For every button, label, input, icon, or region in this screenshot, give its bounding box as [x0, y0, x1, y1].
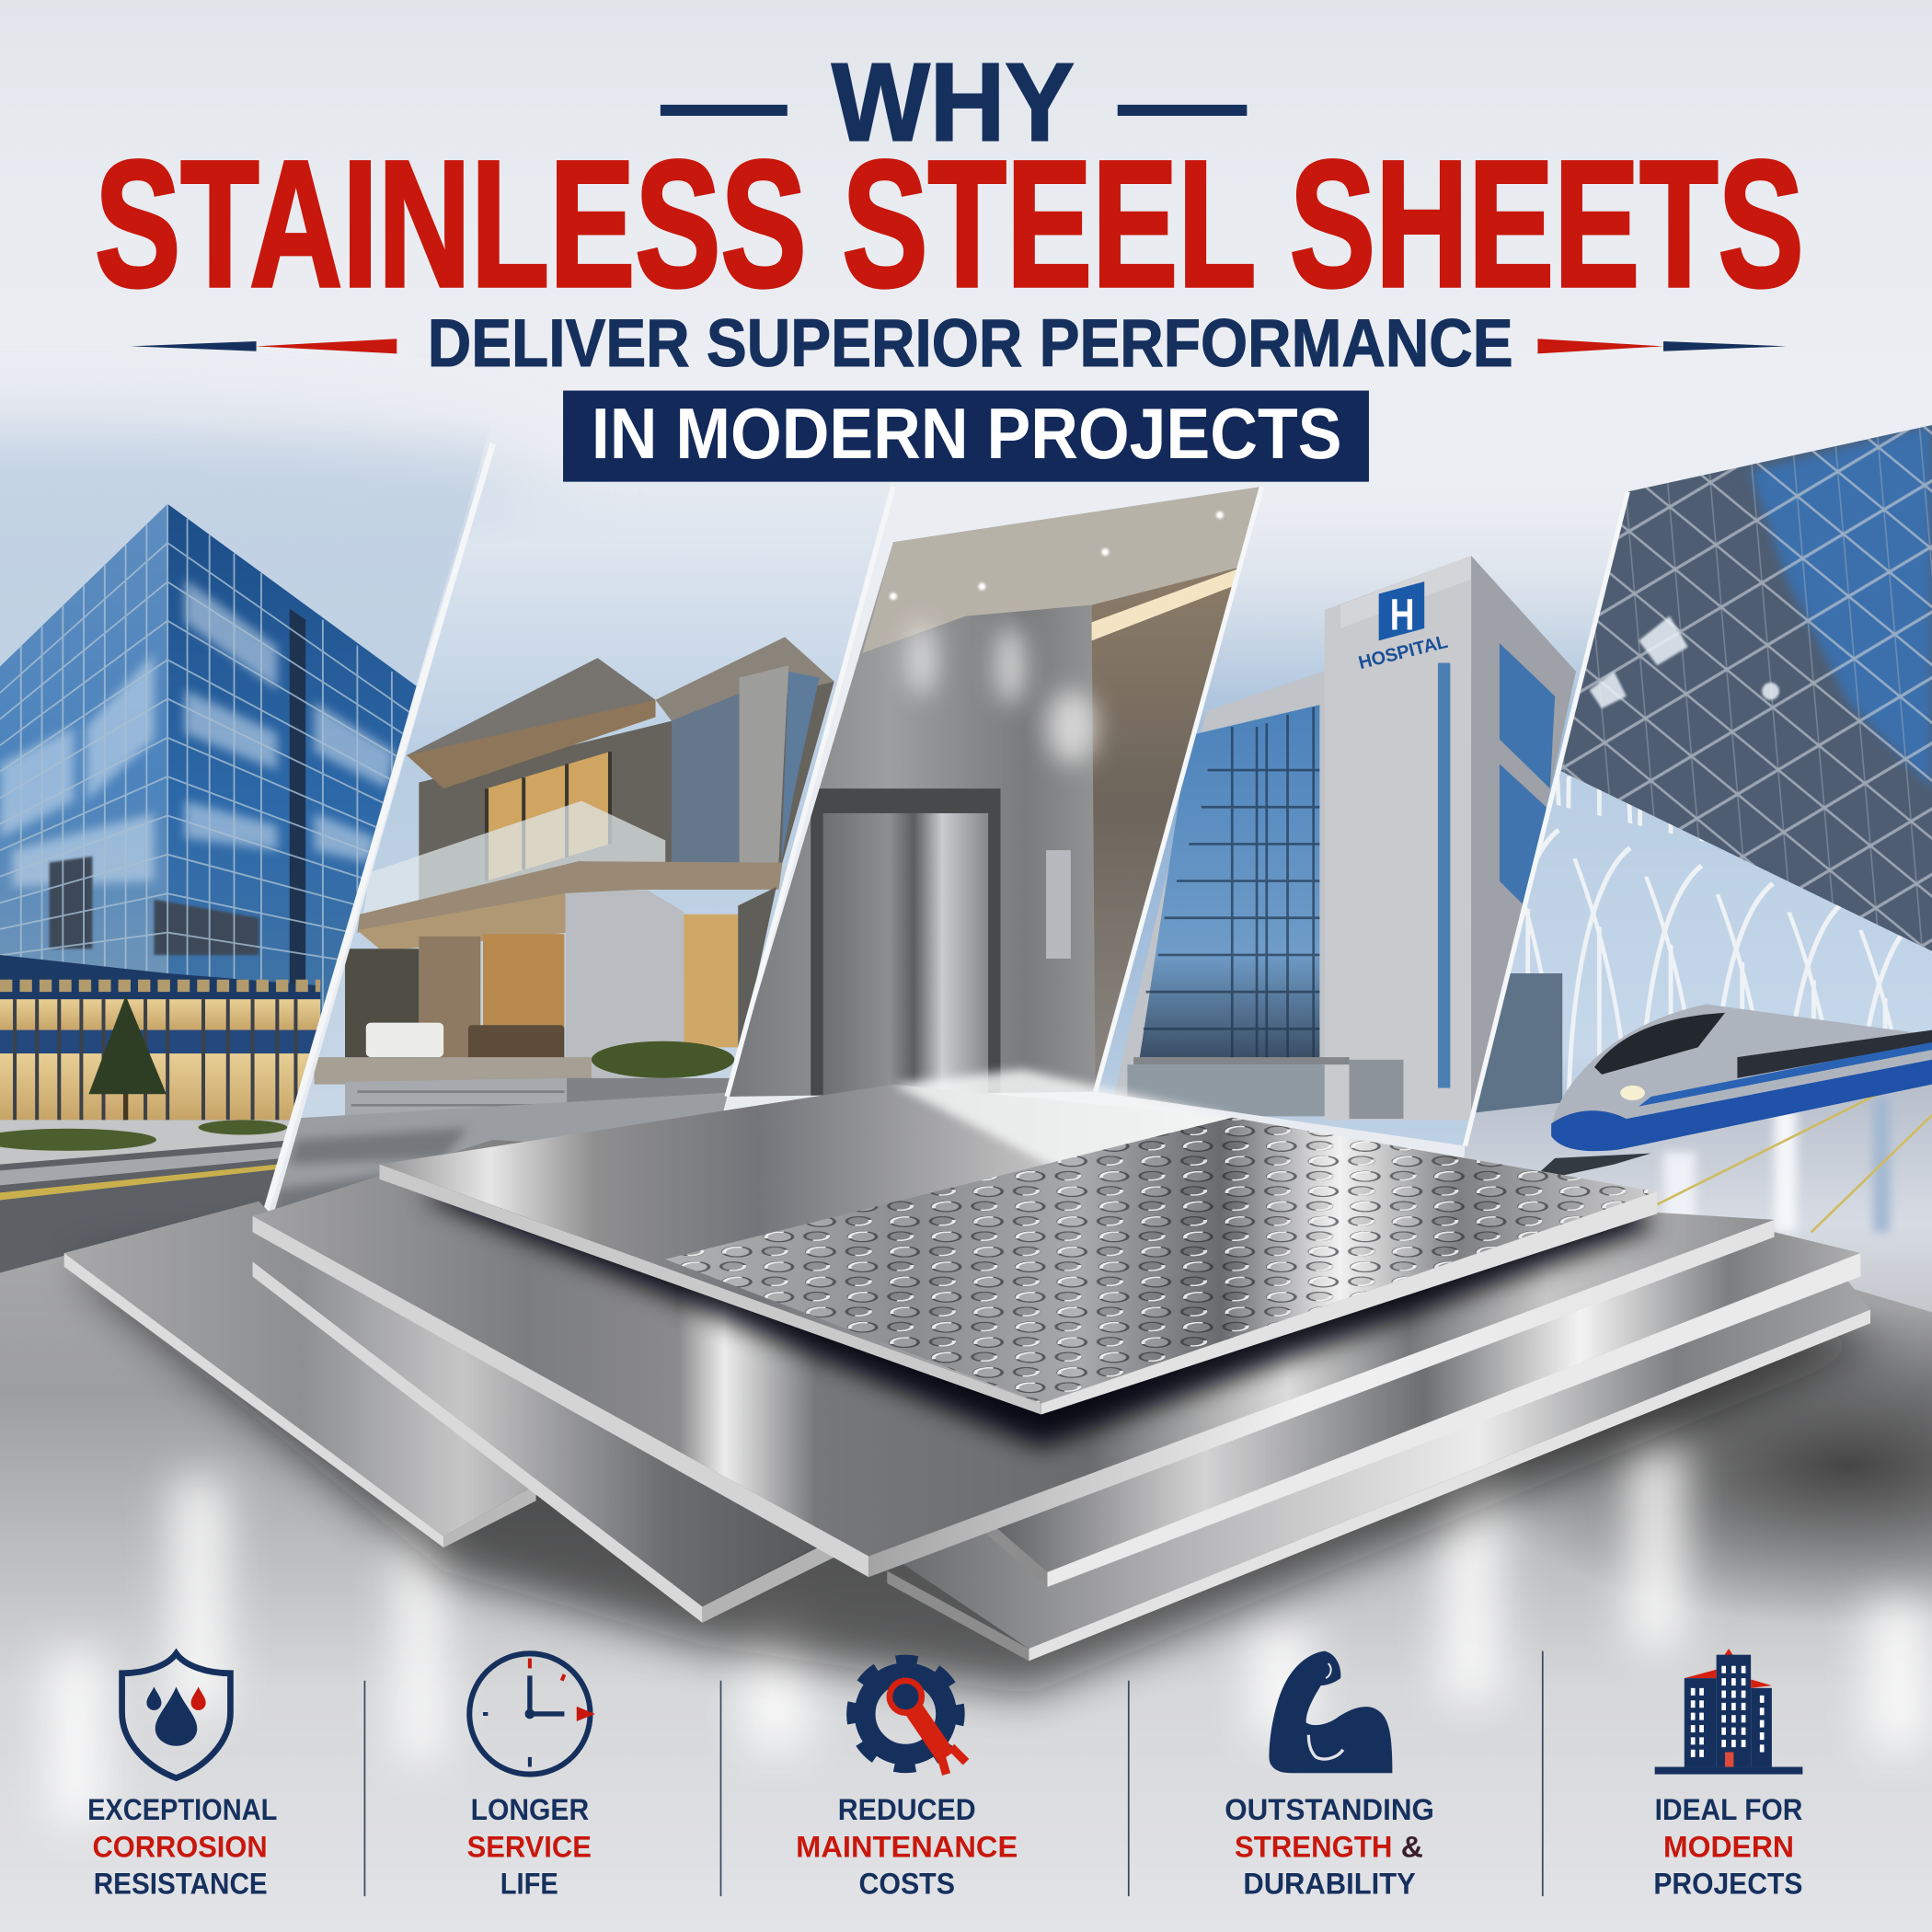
label: reduced maintenance costs: REDUCED [838, 1792, 976, 1826]
label: outstanding strength and durability [1225, 1792, 1434, 1900]
ground floor windows [0, 1053, 320, 1120]
steel floor [0, 1170, 1932, 1932]
column dividers [364, 1651, 1543, 1896]
ceiling [863, 487, 1261, 653]
left roof slab [407, 658, 655, 777]
sheet: lower left [64, 1202, 536, 1547]
track shadow [1528, 1154, 1651, 1183]
elevator frame [811, 788, 1001, 1097]
panel: elevator lobby [727, 487, 1269, 1103]
train [1551, 1005, 1932, 1151]
dark column [290, 609, 305, 985]
headlight [1620, 1086, 1645, 1100]
facade reflections [0, 579, 395, 887]
sheet: middle [253, 1140, 1775, 1577]
sheet: third right [863, 1232, 1860, 1587]
blue fascia [0, 1030, 320, 1053]
balcony slab [357, 861, 782, 933]
mullions [15, 999, 295, 1120]
lower concourse glazing [1466, 973, 1562, 1115]
right lower wall [738, 887, 776, 1060]
balcony glass [363, 801, 665, 914]
pavement [0, 1120, 320, 1165]
white sofa [366, 1023, 443, 1057]
terrace [315, 1057, 592, 1085]
podium canopy [1133, 1057, 1350, 1064]
label: longer service life: LONGER [471, 1792, 589, 1826]
label: reduced maintenance costs: COSTS [858, 1866, 955, 1900]
planter wall [567, 1078, 740, 1120]
hospital H sign: H [1390, 590, 1415, 639]
right ornament [1537, 339, 1787, 353]
floor light streaks [50, 1442, 1928, 1823]
icon: building [1655, 1649, 1802, 1775]
label: longer service life: SERVICE [467, 1829, 592, 1863]
label: longer service life: LIFE [500, 1866, 558, 1900]
label: outstanding strength and durability: OUTSTANDING [1225, 1792, 1434, 1826]
blue skylights [1750, 425, 1932, 788]
stone column [740, 665, 788, 867]
sheet: bottom right [740, 1282, 1870, 1661]
label: reduced maintenance costs: MAINTENANCE [796, 1829, 1018, 1863]
icon: gear and wrench [853, 1661, 966, 1775]
upper mullions [487, 752, 610, 881]
panel: hospital [1085, 487, 1633, 1152]
road [0, 1141, 283, 1273]
podium small windows [0, 981, 320, 990]
brown sofa [468, 1025, 564, 1062]
tower front [1325, 556, 1471, 1120]
villa upper body [419, 682, 834, 912]
right dash [1118, 105, 1247, 116]
wall glows [907, 622, 1097, 764]
hospital label: HOSPITAL [1356, 632, 1450, 673]
heading: why: WHY [832, 40, 1075, 165]
lower left dark section [345, 949, 419, 1060]
title block [95, 40, 1804, 482]
grass [0, 1120, 287, 1151]
panel: rail station [1454, 425, 1932, 1325]
label: exceptional corrosion resistance [87, 1792, 277, 1900]
windshield [1594, 1013, 1725, 1075]
light strip [1092, 569, 1237, 640]
label: longer service life [467, 1792, 592, 1900]
sheet: top embossed [379, 1069, 1657, 1415]
label: exceptional corrosion resistance: RESISTANCE [94, 1866, 268, 1900]
left dash [661, 105, 788, 116]
reflected skyline [50, 857, 259, 955]
paving shadows [271, 1127, 468, 1220]
side stripe [1639, 1041, 1932, 1107]
embossed surface [665, 1118, 1657, 1403]
label: ideal for modern projects: PROJECTS [1653, 1866, 1802, 1900]
yellow road line [0, 1165, 277, 1200]
icon: shield with drops [122, 1653, 230, 1778]
lower soffit [357, 893, 566, 951]
label: ideal for modern projects [1653, 1792, 1803, 1900]
lobby windows [0, 999, 320, 1030]
left soffit [407, 700, 655, 788]
upper warm windows [487, 752, 610, 881]
step edges [351, 1092, 564, 1105]
tree [88, 995, 167, 1121]
upper podium band [0, 955, 320, 1001]
panel: office tower [0, 419, 493, 1282]
curtain wall [1140, 705, 1319, 1060]
glazing grid [1144, 707, 1319, 1060]
elevator doors [823, 813, 988, 1097]
left wing [1109, 667, 1338, 1115]
steel sheet stack [64, 1069, 1885, 1695]
banner: in modern projects: IN MODERN PROJECTS [592, 395, 1341, 474]
lower window [483, 934, 564, 1062]
label: outstanding strength and durability: DURABILITY [1243, 1866, 1416, 1900]
office facade right [167, 504, 425, 1120]
grey glazing [672, 694, 740, 868]
label: outstanding strength and durability: STRENGTH [1235, 1829, 1392, 1863]
floor reflections [1663, 1097, 1890, 1232]
subheading: deliver superior performance: DELIVER SUPERIOR PERFORMANCE [428, 305, 1513, 381]
platform lines [1639, 1090, 1932, 1232]
paving [265, 1090, 764, 1250]
panel dividers [265, 443, 1627, 1215]
panel: villa [275, 500, 886, 1209]
button panel [1046, 850, 1071, 959]
icon: flexed arm [1269, 1651, 1392, 1773]
skylight patches [1590, 616, 1779, 708]
label: ideal for modern projects: MODERN [1663, 1829, 1794, 1863]
white wall [566, 890, 684, 1078]
label: exceptional corrosion resistance: CORROSION [92, 1829, 268, 1863]
left ornament [131, 339, 397, 353]
right side wall [1092, 568, 1237, 1092]
icon: clock [469, 1653, 595, 1775]
lower column [419, 937, 480, 1060]
ceiling spots [890, 512, 1224, 600]
train windows [1737, 1030, 1932, 1078]
right side windows [1438, 643, 1555, 1088]
floor dark reflections [1478, 1306, 1932, 1627]
benefits row [87, 1649, 1803, 1900]
floor lines [0, 504, 419, 1010]
top glare [893, 1069, 1232, 1183]
office facade left [0, 504, 167, 1120]
platform floor [1454, 1072, 1932, 1325]
lobby glazing [1127, 1064, 1325, 1116]
plants [592, 1041, 734, 1078]
station roof [1551, 425, 1932, 951]
right roof slab [655, 637, 834, 720]
stack shadow [74, 1232, 1885, 1695]
roof trusses [1551, 425, 1932, 951]
entrance [1350, 1060, 1403, 1119]
label: outstanding strength and durability: & [1401, 1829, 1423, 1863]
hospital H sign [1379, 581, 1424, 640]
label: reduced maintenance costs [796, 1792, 1018, 1900]
sheet: second left [253, 1189, 857, 1623]
blue nose [1551, 1060, 1932, 1151]
label: ideal for modern projects: IDEAL FOR [1655, 1792, 1803, 1826]
shadow cast by top sheet [419, 1183, 1657, 1448]
tower right face [1471, 556, 1576, 1146]
right lower window [684, 914, 738, 1047]
train body [1551, 1005, 1932, 1151]
arched wall ribs [1472, 776, 1932, 1121]
label: exceptional corrosion resistance: EXCEPTIONAL [87, 1792, 277, 1826]
steps [345, 1078, 567, 1120]
